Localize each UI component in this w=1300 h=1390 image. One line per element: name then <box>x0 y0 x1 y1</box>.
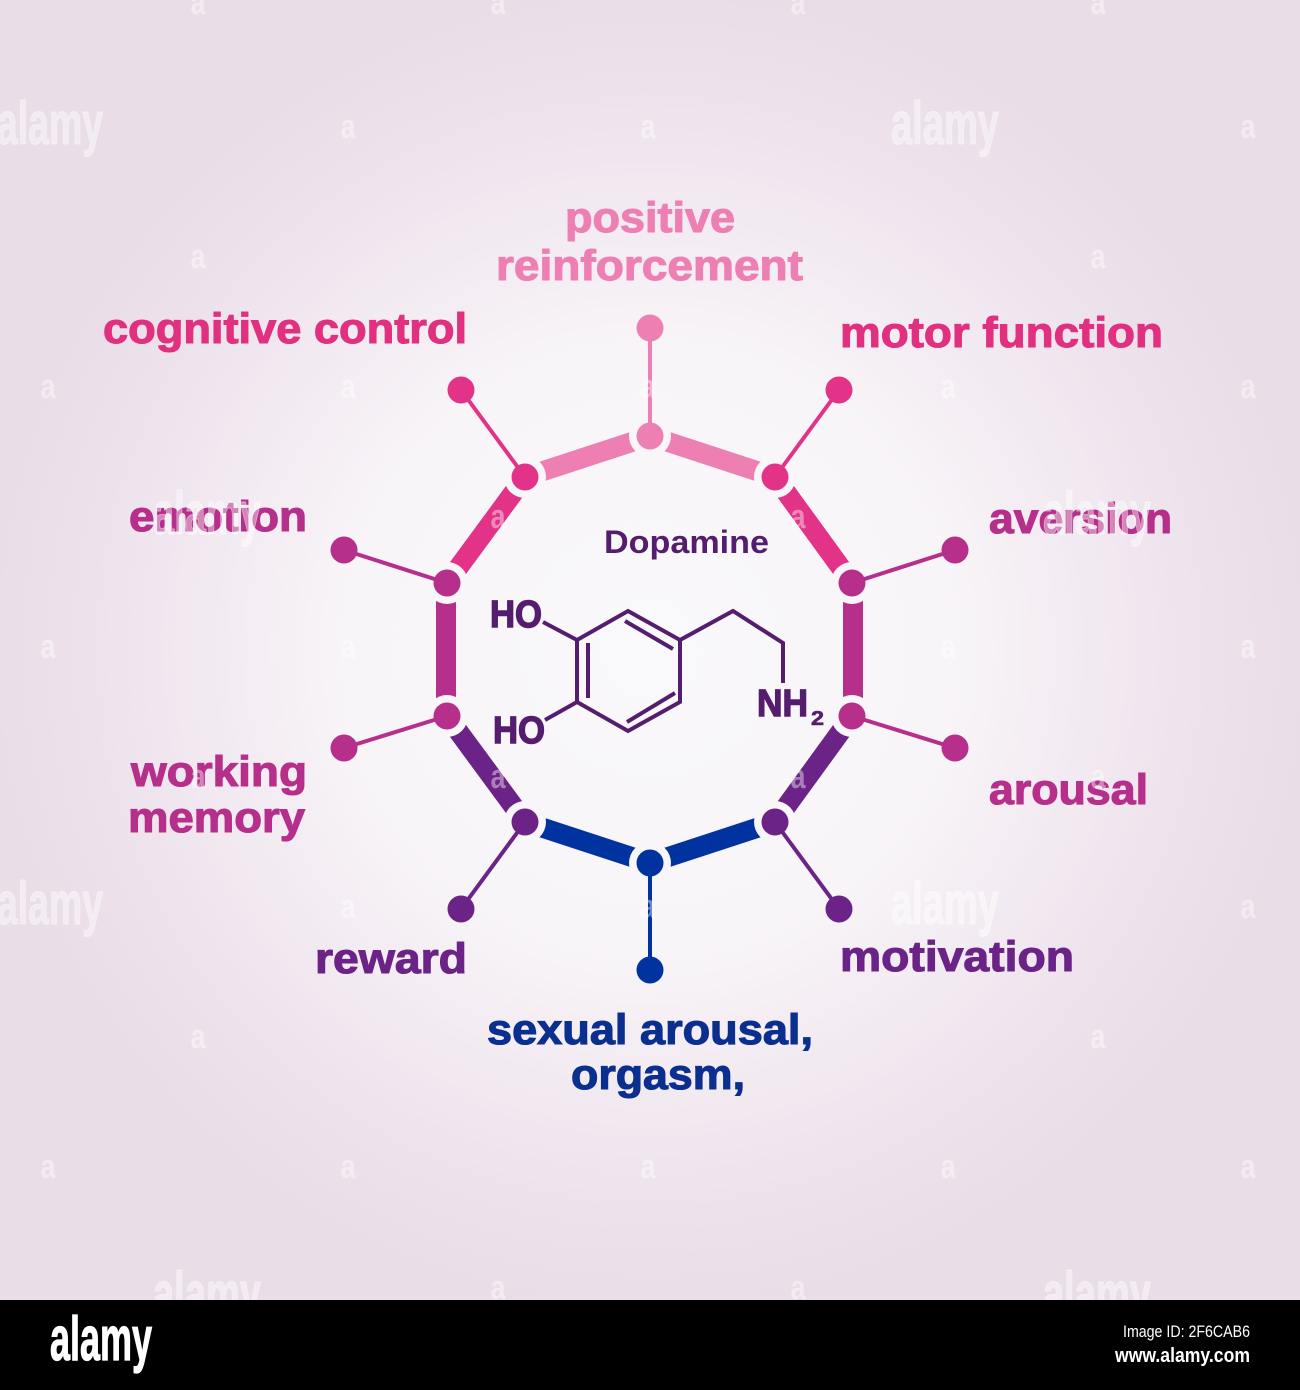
footer image id: Image ID: 2F6CAB6 <box>1123 1322 1250 1341</box>
node: working memory <box>330 702 460 762</box>
node: aversion <box>838 536 968 596</box>
watermark pattern: a <box>490 1269 506 1307</box>
watermark pattern: a <box>340 1148 356 1186</box>
label: positive reinforcement: reinforcement <box>496 242 803 290</box>
group label: NH2: 2 <box>811 708 824 730</box>
watermark pattern: a <box>190 1018 206 1056</box>
watermark pattern: a <box>790 498 806 536</box>
footer bar <box>0 1300 1300 1390</box>
label: positive reinforcement: positive <box>565 194 735 242</box>
watermark pattern: a <box>1240 108 1256 146</box>
watermark pattern: a <box>40 368 56 406</box>
node: emotion <box>330 536 460 596</box>
ring of thick bonds <box>446 436 853 863</box>
watermark pattern: a <box>940 368 956 406</box>
watermark pattern: alamy <box>153 1260 261 1327</box>
label: arousal: arousal <box>989 766 1148 814</box>
watermark pattern: a <box>1090 758 1106 796</box>
label: working memory: memory <box>128 794 305 842</box>
watermark pattern: a <box>790 758 806 796</box>
watermark pattern: alamy <box>153 480 261 547</box>
title: Dopamine: Dopamine <box>604 524 769 560</box>
watermark pattern: a <box>1090 1018 1106 1056</box>
label: aversion: aversion <box>989 495 1172 543</box>
watermark pattern: alamy <box>0 90 103 157</box>
watermark pattern: a <box>340 888 356 926</box>
node: cognitive control <box>448 376 538 490</box>
watermark pattern: a <box>1240 368 1256 406</box>
label: sexual arousal, orgasm: orgasm, <box>571 1051 745 1099</box>
benzene ring and bonds <box>543 611 783 731</box>
footer logo: alamy <box>50 1305 152 1374</box>
watermark pattern: a <box>490 758 506 796</box>
watermark pattern: a <box>490 498 506 536</box>
footer url: www.alamy.com <box>1114 1345 1250 1367</box>
label: motor function: motor function <box>840 309 1163 357</box>
watermark pattern: a <box>640 368 656 406</box>
watermark pattern: a <box>340 368 356 406</box>
watermark pattern: a <box>1240 628 1256 666</box>
node: motor function <box>762 376 852 490</box>
label: sexual arousal, orgasm: sexual arousal, <box>487 1006 813 1054</box>
watermark pattern: a <box>340 108 356 146</box>
node: arousal <box>838 702 968 762</box>
node: positive reinforcement <box>636 314 664 450</box>
dopamine structural formula <box>490 594 824 752</box>
label: sexual arousal, orgasm <box>487 1006 813 1099</box>
group label: upper HO: HO <box>490 594 542 636</box>
watermark pattern: alamy <box>891 870 999 937</box>
watermark pattern: alamy <box>1043 1260 1151 1327</box>
node: motivation <box>762 808 852 922</box>
watermark pattern: a <box>640 888 656 926</box>
group label: lower HO: HO <box>493 710 545 752</box>
watermark pattern: a <box>40 628 56 666</box>
watermark pattern: a <box>190 758 206 796</box>
watermark pattern: alamy <box>891 90 999 157</box>
node: reward <box>448 808 538 922</box>
label: positive reinforcement <box>496 194 803 290</box>
label: working memory: working <box>130 748 307 796</box>
node: sexual arousal <box>636 850 664 984</box>
watermark pattern: alamy <box>1043 480 1151 547</box>
watermark pattern: a <box>940 628 956 666</box>
watermark pattern: a <box>340 628 356 666</box>
label: emotion: emotion <box>129 493 307 541</box>
watermark pattern: a <box>190 238 206 276</box>
watermark pattern: a <box>940 1148 956 1186</box>
label: working memory <box>128 748 307 842</box>
watermark pattern: a <box>40 1148 56 1186</box>
watermark pattern: alamy <box>0 870 103 937</box>
watermark pattern: a <box>640 108 656 146</box>
label: reward: reward <box>315 935 467 983</box>
group label: NH2: NH <box>757 683 808 725</box>
label: cognitive control: cognitive control <box>103 305 467 353</box>
watermark pattern: a <box>790 1269 806 1307</box>
watermark pattern: a <box>1240 1148 1256 1186</box>
watermark pattern: a <box>1240 888 1256 926</box>
watermark pattern: a <box>1090 238 1106 276</box>
watermark pattern: a <box>640 1148 656 1186</box>
label: motivation: motivation <box>840 933 1074 981</box>
